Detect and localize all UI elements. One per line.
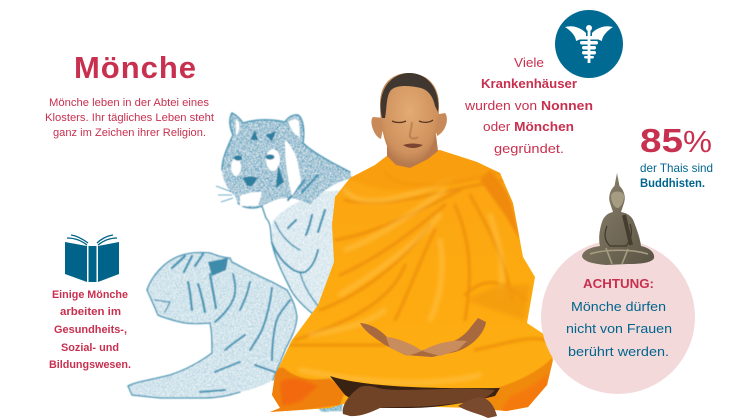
statue body bbox=[582, 173, 654, 265]
callout text: ACHTUNG: berührt werden. bbox=[568, 344, 669, 359]
text block: hospitals: wurden von Nonnen bbox=[464, 98, 593, 113]
tiger: lower, lying bbox=[128, 252, 343, 412]
text block: health and education: Bildungswesen. bbox=[49, 359, 131, 371]
statistic caption: der Thais sind bbox=[640, 161, 713, 175]
intro text block: ganz im Zeichen ihrer Religion. bbox=[53, 127, 206, 139]
text block: hospitals: oder Mönchen bbox=[483, 119, 574, 134]
monk: orange robe bbox=[268, 150, 556, 415]
text block: hospitals: Krankenhäuser bbox=[481, 76, 577, 91]
text block: hospitals bbox=[464, 55, 593, 156]
statistic: 85%: 85 bbox=[640, 122, 683, 159]
statistic caption bbox=[640, 161, 713, 190]
intro text block bbox=[45, 97, 214, 139]
monk: arms and hands bbox=[360, 318, 486, 357]
text block: health and education: Sozial- und bbox=[61, 342, 119, 354]
heading: Mönche: Mönche bbox=[74, 50, 196, 85]
callout text: ACHTUNG: ACHTUNG: bbox=[583, 276, 654, 291]
text block: health and education: arbeiten im bbox=[60, 306, 121, 318]
tiger: upper, seated bbox=[216, 113, 355, 320]
text block: health and education: Einige Mönche bbox=[52, 289, 128, 301]
statistic: 85%: % bbox=[683, 124, 712, 159]
icon: caduceus in blue circle bbox=[555, 10, 623, 78]
statistic: 85% bbox=[640, 122, 712, 159]
pink callout circle bbox=[541, 240, 695, 394]
intro text block: Mönche leben in der Abtei eines bbox=[49, 97, 209, 109]
monk photograph bbox=[268, 73, 556, 418]
illustration: two tigers bbox=[128, 113, 355, 412]
monk: neck and head bbox=[371, 73, 447, 168]
callout text: ACHTUNG: nicht von Frauen bbox=[566, 321, 672, 336]
icon: open book bbox=[65, 235, 119, 282]
text block: hospitals: Viele bbox=[514, 55, 544, 70]
statue shading bbox=[611, 192, 624, 208]
callout text: ACHTUNG bbox=[566, 276, 672, 359]
statistic caption: Buddhisten. bbox=[640, 176, 705, 190]
text block: health and education bbox=[49, 289, 131, 371]
text block: hospitals: gegründet. bbox=[494, 141, 564, 156]
monk: crossed legs and feet bbox=[330, 376, 500, 418]
icon: Buddha statue bbox=[582, 173, 654, 265]
callout text: ACHTUNG: Mönche dürfen bbox=[571, 299, 666, 314]
text block: health and education: Gesundheits-, bbox=[54, 324, 127, 336]
intro text block: Klosters. Ihr tägliches Leben steht bbox=[45, 112, 214, 124]
